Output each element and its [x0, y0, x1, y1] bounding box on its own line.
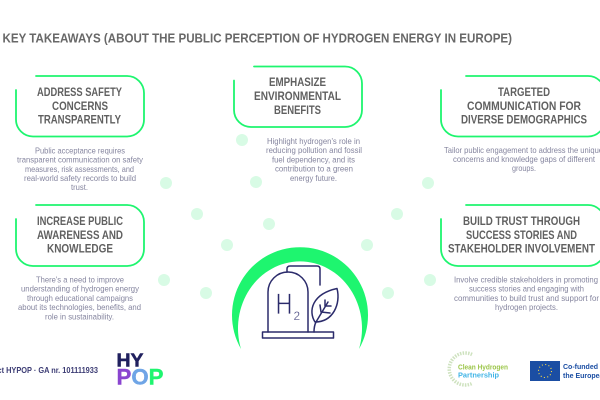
heading: ADDRESS SAFETY — [37, 85, 122, 99]
label: co-funded — [563, 364, 600, 380]
heading: TRANSPARENTLY — [38, 112, 121, 126]
emblem arc — [449, 353, 472, 385]
logo: Clean Hydrogen Partnership: Partnership — [458, 372, 499, 380]
card frame — [234, 66, 362, 127]
card frame — [441, 76, 600, 136]
body text: fuel dependency, and its — [272, 154, 355, 164]
body text: about its technologies, benefits, and — [18, 302, 141, 312]
heading — [461, 85, 587, 126]
body text: hydrogen projects. — [495, 302, 558, 312]
heading — [37, 214, 123, 256]
icon: hydrogen tank and leaf — [262, 266, 338, 338]
panel: public awareness — [16, 205, 144, 321]
body text: measures, risk assessments, and — [25, 164, 134, 174]
body text — [266, 136, 362, 183]
logo: HyPOP: POP — [116, 364, 164, 390]
title: KEY TAKEAWAYS (ABOUT THE PUBLIC PERCEPTION OF HYDROGEN ENERGY IN EUROPE) — [2, 30, 512, 46]
body text: understanding of hydrogen energy — [21, 284, 140, 294]
panel: address safety — [16, 76, 144, 192]
heading: CONCERNS — [52, 99, 108, 113]
icon: leaf — [312, 288, 338, 332]
body text: There's a need to improve — [36, 274, 124, 284]
body text: energy future. — [290, 173, 337, 183]
label: H2: 2 — [294, 309, 300, 323]
logo: Clean Hydrogen Partnership — [449, 353, 508, 385]
body text — [444, 145, 600, 173]
heading: TARGETED — [498, 85, 550, 99]
body text: reducing pollution and fossil — [266, 145, 362, 155]
body text — [454, 274, 599, 312]
logo: Clean Hydrogen Partnership: Clean Hydrogen — [458, 364, 508, 372]
heading: COMMUNICATION FOR — [467, 99, 581, 113]
panel: environmental benefits — [234, 66, 362, 183]
body text: real-world safety records to build — [24, 173, 136, 183]
body text: Highlight hydrogen's role in — [267, 136, 360, 146]
heading — [37, 85, 122, 126]
body text — [17, 146, 144, 192]
heading: BENEFITS — [274, 103, 321, 117]
body text: trust. — [71, 182, 88, 192]
body text: through educational campaigns — [27, 293, 133, 303]
panel: targeted communication — [441, 76, 600, 173]
panel: build trust — [441, 205, 600, 312]
card frame — [16, 205, 144, 266]
body text — [18, 274, 141, 321]
body text: Public acceptance requires — [35, 146, 125, 156]
heading: INCREASE PUBLIC — [37, 214, 123, 228]
body text: contribution to a green — [275, 164, 353, 174]
body text: success stories and engaging with — [469, 284, 584, 294]
heading: EMPHASIZE — [269, 75, 326, 89]
logo: HyPOP: HY — [116, 350, 144, 370]
body text: transparent communication on safety — [17, 155, 144, 165]
label: H2: H — [276, 288, 292, 321]
logo: EU flag — [530, 361, 560, 381]
decorative dots — [158, 134, 436, 299]
green crescent — [232, 247, 368, 349]
heading: ENVIRONMENTAL — [254, 89, 341, 103]
logo: HyPOP — [116, 350, 164, 390]
heading — [254, 75, 341, 117]
heading: AWARENESS AND — [37, 228, 123, 242]
heading — [448, 214, 596, 256]
body text: role in sustainability. — [45, 311, 114, 321]
body text: groups. — [512, 163, 536, 173]
heading: KNOWLEDGE — [47, 242, 113, 256]
card frame — [16, 76, 144, 136]
card frame — [441, 205, 600, 266]
